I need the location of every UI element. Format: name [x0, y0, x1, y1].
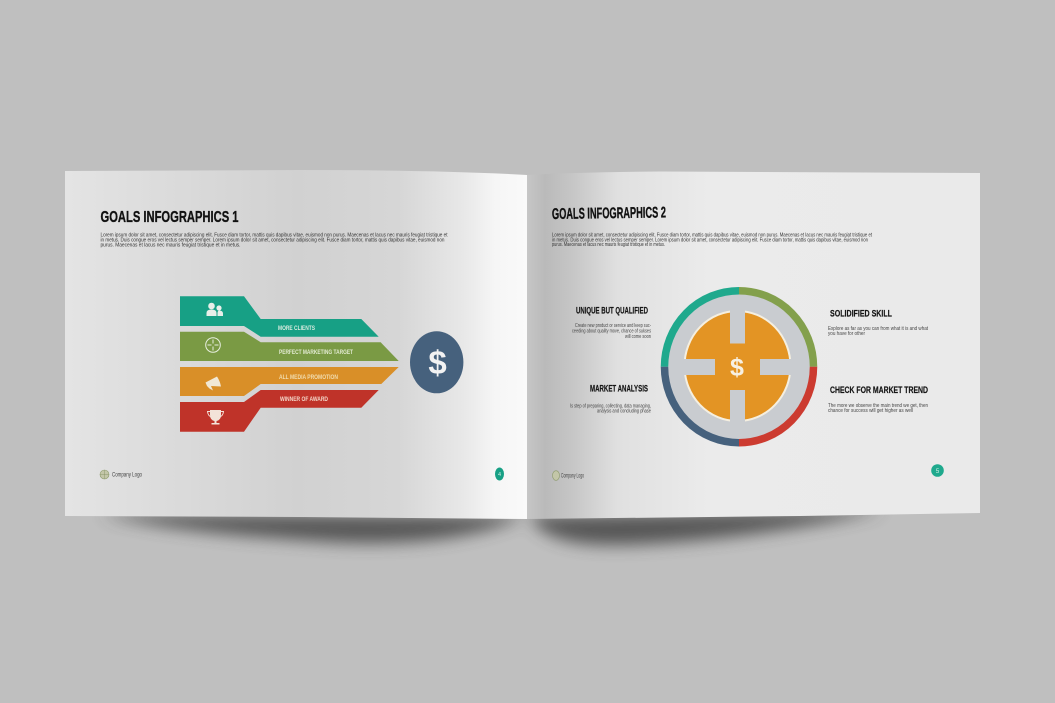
- left page: [65, 170, 527, 519]
- left page body text: [100, 232, 448, 248]
- dollar circle: [410, 331, 463, 393]
- label: market analysis: Is step of preparing, collecting, data managing,: [570, 404, 651, 410]
- label: solidified skill: SOLIDIFIED SKILL: [830, 308, 892, 320]
- label: market analysis: MARKET ANALYSIS: [590, 384, 648, 394]
- right page body text: purus. Maecenas et lacus nec mauris feugiat tristique et in metus.: [552, 242, 665, 248]
- right page body text: in metus. Duis congue eros vel lectus semper semper. Lorem ipsum dolor sit amet, consectetur adipiscing elit. Fusce diam tortor, mattis quis dapibus vitae, euismod non: [552, 238, 868, 244]
- label: unique but qualified: will come soon: [624, 334, 651, 340]
- dollar circle: $: [428, 344, 447, 381]
- right footer logo: Company Logo: [561, 474, 584, 480]
- left page body text: purus. Maecenas et lacus nec mauris feugiat tristique et in metus.: [100, 242, 241, 248]
- arrow band: winner of award: WINNER OF AWARD: [280, 396, 328, 403]
- arrow band: more clients: [180, 296, 379, 337]
- icon: megaphone: [206, 376, 221, 390]
- right page body text: Lorem ipsum dolor sit amet, consectetur adipiscing elit. Fusce diam tortor, mattis quis dapibus vitae, euismod non purus. Maecenas et lacus nec mauris feugiat tristique et: [552, 232, 872, 238]
- ring segment: teal: [664, 291, 739, 367]
- label: market analysis: [570, 384, 651, 414]
- right page number: [931, 464, 944, 477]
- left page title: GOALS INFOGRAPHICS 1: [100, 209, 239, 226]
- ring segment: red: [739, 367, 814, 443]
- label: solidified skill: Explore as far as you can from what it is and what: [828, 326, 928, 332]
- left page body text: in metus. Duis congue eros vel lectus semper semper. Lorem ipsum dolor sit amet, consectetur adipiscing elit. Fusce diam tortor, mattis quis dapibus vitae, euismod non: [100, 238, 444, 244]
- right page body text: [552, 232, 872, 248]
- label: unique but qualified: ceeding about quality move, chance of sukses: [572, 328, 651, 334]
- arrow band: perfect marketing target: PERFECT MARKETING TARGET: [279, 349, 353, 356]
- label: check for market trend: [828, 385, 928, 414]
- label: check for market trend: chance for success will get higher as well: [828, 408, 913, 414]
- arrow band: more clients: MORE CLIENTS: [278, 325, 315, 332]
- circular diagram: [663, 291, 815, 443]
- arrow band: all media promotion: [180, 367, 399, 396]
- icon: target: [206, 338, 220, 352]
- cross arms: [682, 308, 793, 424]
- centre dollar: $: [730, 354, 744, 382]
- left footer logo: [100, 470, 142, 479]
- label: check for market trend: CHECK FOR MARKET TREND: [830, 385, 928, 396]
- grey disc: [663, 291, 815, 443]
- label: unique but qualified: Create new product or service and keep suc-: [575, 323, 651, 329]
- icon: trophy: [208, 410, 224, 424]
- ring segment: navy: [664, 367, 739, 443]
- left page number: [495, 468, 504, 480]
- ring segment: green: [739, 291, 814, 367]
- right page number: 5: [936, 469, 940, 475]
- label: market analysis: analysis and concluding phase: [597, 408, 651, 414]
- label: check for market trend: The more we observe the main trend we get, then: [828, 403, 928, 409]
- right page: [527, 172, 980, 519]
- label: solidified skill: you have for other: [828, 331, 865, 337]
- left page number: 4: [498, 472, 501, 478]
- orange centre: [684, 311, 790, 421]
- page shadows: [100, 510, 885, 545]
- arrow band: winner of award: [180, 390, 379, 432]
- left page body text: Lorem ipsum dolor sit amet, consectetur adipiscing elit. Fusce diam tortor, mattis quis dapibus vitae, euismod non purus. Maecenas et lacus nec mauris feugiat tristique et: [100, 232, 448, 238]
- right footer logo: [552, 471, 584, 480]
- left footer logo: Company Logo: [112, 472, 142, 478]
- label: unique but qualified: [572, 306, 651, 340]
- right page title: GOALS INFOGRAPHICS 2: [552, 204, 666, 223]
- icon: people: [206, 303, 223, 316]
- label: unique but qualified: UNIQUE BUT QUALIFIED: [576, 306, 648, 316]
- label: solidified skill: [828, 308, 928, 337]
- arrow band: perfect marketing target: [180, 332, 399, 361]
- arrow band: all media promotion: ALL MEDIA PROMOTION: [279, 374, 338, 381]
